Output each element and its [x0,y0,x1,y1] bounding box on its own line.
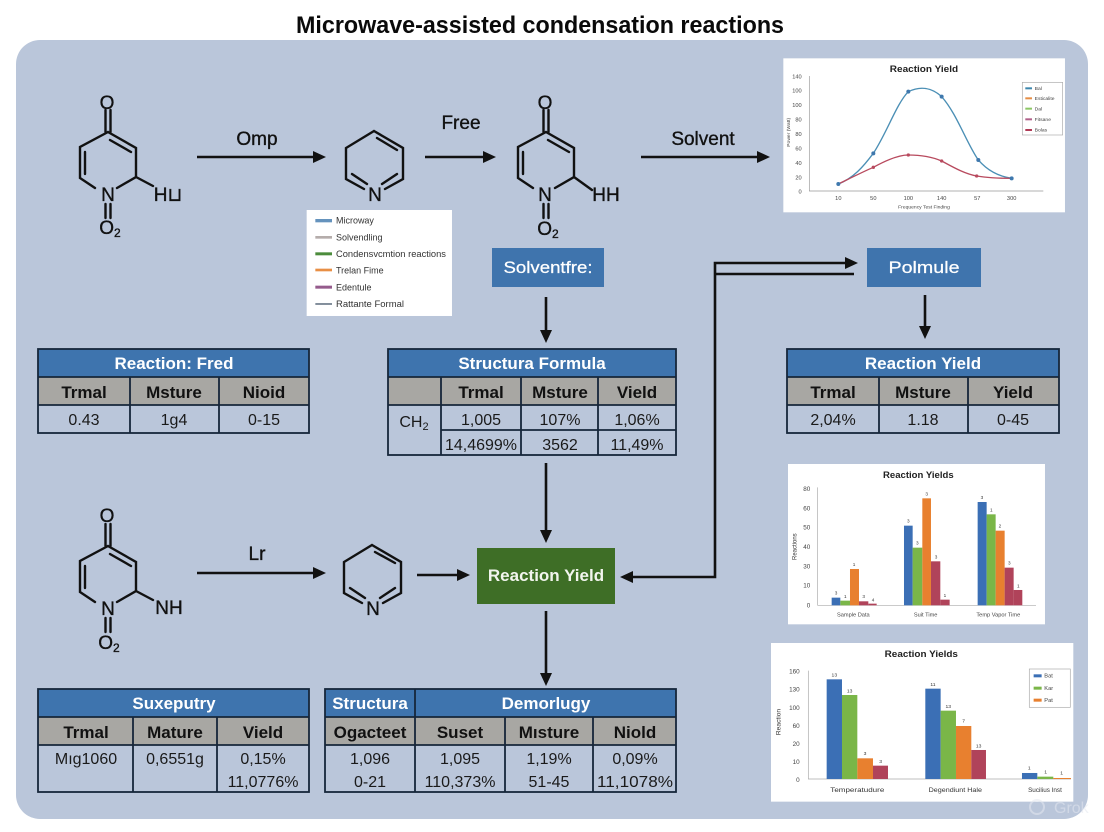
line chart: Reaction Yield: 300 [1007,196,1016,202]
table: Reaction Yield: 2,04% [810,412,856,429]
table: Suxeputry: Trmal [63,723,109,742]
table: Demorlugy: Demorlugy [502,694,591,713]
molecule: top middle: HH [592,185,620,206]
arrow: feedback to Polmule and Reaction Yield [620,257,858,583]
table: Structura Formula: Vield [617,383,657,402]
legend box: Trelan Fime [336,266,384,276]
molecule: top left: N [101,185,115,206]
bar chart: Reaction Yields middle: Reactions [793,533,799,560]
table: Demorlugy: 0-21 [354,774,386,791]
molecule: top left: 2 [114,226,121,240]
table: Demorlugy: Mısture [519,723,579,742]
arrow: Lr: Lr [249,544,266,565]
bar chart: Reaction Yields bottom: Pat [1044,698,1053,704]
bar chart: Reaction Yields middle: Temp Vapor Time [976,613,1020,619]
table: Structura Formula: 1,06% [614,412,660,429]
bar chart: Reaction Yields bottom: Degendiunt Hale [929,787,983,794]
bar chart: Reaction Yields middle: 10 [803,583,811,590]
table: Suxeputry: Vield [243,723,283,742]
bar chart: Reaction Yields middle: 3 [1008,561,1011,566]
table: Suxeputry: Mıg1060 [55,751,117,768]
line chart: Reaction Yield [783,58,1065,212]
bar chart: Reaction Yields middle: 2 [999,524,1002,529]
table: Demorlugy: 11,1078% [597,774,673,791]
table: Reaction Fred: Reaction: Fred [114,354,234,373]
line chart: Reaction Yield: 60 [795,146,802,152]
line chart: Reaction Yield: 40 [795,161,802,167]
bar chart: Reaction Yields bottom: 7 [962,719,965,725]
box: Reaction Yield [477,548,615,604]
box: Solventfre [492,248,604,287]
bar chart: Reaction Yields bottom: 1 [1028,766,1031,772]
bar chart: Reaction Yields middle: 1 [853,562,856,567]
box: Solventfre: Solventfre: [504,258,592,277]
table: Reaction Fred: 1g4 [161,412,187,429]
molecule: bottom left: NH [155,598,183,619]
table: Demorlugy: Structura [332,694,408,713]
table: Structura Formula: CH [399,414,422,431]
bar chart: Reaction Yields middle: 3 [981,495,984,500]
arrow: pyridine to Reaction Yield [417,569,470,581]
bar chart: Reaction Yields middle: 3 [925,491,928,496]
bar chart: Reaction Yields bottom: 1 [1060,771,1063,777]
table: Suxeputry [38,689,309,792]
bar chart: Reaction Yields bottom: Sucilius Inst [1028,787,1062,794]
line chart: Reaction Yield: 57 [974,196,980,202]
line chart: Reaction Yield: Bolas [1035,128,1048,134]
bar chart: Reaction Yields middle [788,464,1045,624]
legend box: Rattante Formal [336,299,404,309]
table: Structura Formula: 3562 [542,437,578,454]
molecule: top middle: O [538,93,552,114]
molecule: top left [80,93,182,240]
molecule: top middle [518,93,620,241]
bar chart: Reaction Yields bottom: Kar [1044,686,1053,692]
table: Demorlugy [325,689,676,792]
bar chart: Reaction Yields middle: 50 [803,525,811,532]
bar chart: Reaction Yields middle: 3 [835,590,838,595]
molecule: top middle: N [538,185,552,206]
bar chart: Reaction Yields bottom: 1 [1044,770,1047,776]
bar chart: Reaction Yields bottom: 0 [796,777,800,784]
box: Reaction Yield: Reaction Yield [488,566,604,585]
table: Demorlugy: Suset [437,723,483,742]
molecule: bottom left [80,506,183,655]
table: Reaction Yield: 0-45 [997,412,1029,429]
table: Demorlugy: 1,19% [526,751,572,768]
bar chart: Reaction Yields bottom: 11 [930,682,936,688]
bar chart: Reaction Yields middle: 1 [844,594,847,599]
arrow: Solventfre to table [540,297,552,343]
line chart: Reaction Yield: Fitsane [1035,117,1051,123]
table: Demorlugy: 51-45 [529,774,570,791]
line chart: Reaction Yield: Power (Watt) [786,118,792,147]
molecule: top middle: 2 [552,227,559,241]
molecule: bottom left: N [101,599,115,620]
table: Reaction Yield: 1.18 [907,412,939,429]
molecule: top left: O [99,218,114,239]
table: Reaction Fred: Nioid [243,383,285,402]
bar chart: Reaction Yields middle: 60 [803,505,811,512]
molecule: pyridine top [346,131,403,206]
molecule: top left: O [100,93,114,114]
line chart: Reaction Yield: 140 [937,196,946,202]
box: Polmule: Polmule [888,258,960,277]
bar chart: Reaction Yields bottom: 10 [793,759,800,766]
line chart: Reaction Yield: 50 [870,196,876,202]
watermark [1030,800,1090,817]
bar chart: Reaction Yields bottom: 130 [789,687,800,694]
bar chart: Reaction Yields bottom: 13 [847,688,853,694]
bar chart: Reaction Yields middle: Reaction Yields [883,470,954,480]
bar chart: Reaction Yields middle: 40 [803,544,811,551]
table: Reaction Yield: Yield [993,383,1033,402]
table: Suxeputry: 11,0776% [228,774,298,791]
bar chart: Reaction Yields bottom: Reaction [775,709,782,735]
line chart: Reaction Yield: 100 [792,103,802,109]
bar chart: Reaction Yields middle: 3 [916,541,919,546]
table: Structura Formula: Msture [532,383,588,402]
table: Reaction Fred: Trmal [61,383,107,402]
molecule: bottom left: O [98,633,113,654]
line chart: Reaction Yield: 80 [795,117,802,123]
bar chart: Reaction Yields bottom: 3 [864,751,867,757]
molecule: top left: H⊔ [154,185,182,206]
bar chart: Reaction Yields middle: 1 [944,593,947,598]
table: Demorlugy: 0,09% [612,751,658,768]
bar chart: Reaction Yields bottom: 20 [793,741,800,748]
arrow: Reaction Yield to tables [540,611,552,686]
arrow: Solvent: Solvent [671,129,735,150]
legend box: Microway [336,216,374,226]
bar chart: Reaction Yields middle: 3 [862,594,865,599]
table: Reaction Fred [38,349,309,433]
bar chart: Reaction Yields bottom: 13 [946,704,951,710]
molecule: bottom left: O [100,506,114,527]
line chart: Reaction Yield: 140 [792,75,802,81]
line chart: Reaction Yield: 0 [799,189,802,195]
bar chart: Reaction Yields middle: Sample Data [837,613,871,619]
line chart: Reaction Yield: Bal [1035,86,1042,92]
bar chart: Reaction Yields middle: 0 [807,603,811,610]
table: Demorlugy: Ogacteet [334,723,407,742]
arrow: table to Reaction Yield [540,463,552,543]
table: Demorlugy: 1,095 [440,751,480,768]
bar chart: Reaction Yields middle: 3 [907,518,910,523]
table: Structura Formula: Trmal [458,383,504,402]
legend box: Solvendling [336,233,382,243]
watermark: Grok [1054,800,1090,817]
table: Demorlugy: Niold [614,723,656,742]
bar chart: Reaction Yields middle: 30 [803,563,811,570]
bar chart: Reaction Yields middle: 1 [1017,583,1020,588]
table: Reaction Yield [787,349,1059,433]
title: Microwave-assisted condensation reactions [296,12,784,39]
molecule: top middle: O [537,219,552,240]
line chart: Reaction Yield: Dal [1035,106,1042,112]
table: Structura Formula: 107% [540,412,580,429]
table: Structura Formula: Structura Formula [458,354,606,373]
bar chart: Reaction Yields bottom: 3 [879,759,882,765]
line chart: Reaction Yield: 10 [835,196,841,202]
bar chart: Reaction Yields middle: 4 [872,598,875,603]
bar chart: Reaction Yields bottom: 60 [793,723,800,730]
bar chart: Reaction Yields bottom: 13 [832,673,837,679]
bar chart: Reaction Yields middle: Suit Time [914,613,937,619]
table: Suxeputry: Mature [147,723,203,742]
table: Suxeputry: 0,6551g [146,751,204,768]
molecule: pyridine bottom: N [366,599,380,620]
arrow: Omp [197,129,326,163]
line chart: Reaction Yield: 20 [795,176,802,182]
line chart: Reaction Yield: Frequency Test Finding [898,205,950,211]
table: Reaction Yield: Reaction Yield [865,354,981,373]
arrow: Solvent [641,129,770,163]
table: Structura Formula [388,349,676,455]
arrow: Free [425,113,496,163]
bar chart: Reaction Yields bottom: Reaction Yields [885,649,958,659]
arrow: Omp: Omp [236,129,278,150]
table: Reaction Yield: Msture [895,383,951,402]
table: Suxeputry: 0,15% [240,751,286,768]
line chart: Reaction Yield: Reaction Yield [890,64,958,74]
table: Reaction Yield: Trmal [810,383,856,402]
legend box: Edentule [336,282,371,292]
molecule: pyridine top: N [368,185,382,206]
legend box: Condensvcmtion reactions [336,249,447,259]
molecule: pyridine bottom [344,545,401,620]
bar chart: Reaction Yields bottom [771,643,1073,802]
table: Structura Formula: 1,005 [461,412,501,429]
table: Reaction Fred: 0.43 [68,412,100,429]
molecule: bottom left: 2 [113,641,120,655]
box: Polmule [867,248,981,287]
table: Structura Formula: 11,49% [610,437,664,454]
bar chart: Reaction Yields middle: 1 [990,507,993,512]
table: Structura Formula: 14,4699% [445,437,517,454]
table: Structura Formula: 2 [422,421,429,433]
table: Suxeputry: Suxeputry [132,694,216,713]
arrow: Lr [197,544,326,579]
line chart: Reaction Yield: 100 [904,196,913,202]
arrow: Free: Free [441,113,481,134]
bar chart: Reaction Yields middle: 80 [803,486,811,493]
bar chart: Reaction Yields bottom: 13 [976,743,982,749]
table: Reaction Fred: 0-15 [248,412,280,429]
line chart: Reaction Yield: Esticalite [1035,96,1055,102]
line chart: Reaction Yield: 100 [792,89,802,95]
bar chart: Reaction Yields bottom: Temperatudure [830,787,885,794]
legend box [307,210,452,316]
bar chart: Reaction Yields bottom: Bat [1044,674,1053,680]
arrow: Polmule to table [919,295,931,339]
bar chart: Reaction Yields bottom: 160 [789,669,800,676]
bar chart: Reaction Yields bottom: 100 [789,705,800,712]
table: Demorlugy: 110,373% [425,774,495,791]
bar chart: Reaction Yields middle: 3 [935,554,938,559]
table: Demorlugy: 1,096 [350,751,390,768]
table: Reaction Fred: Msture [146,383,202,402]
line chart: Reaction Yield: 80 [795,132,802,138]
